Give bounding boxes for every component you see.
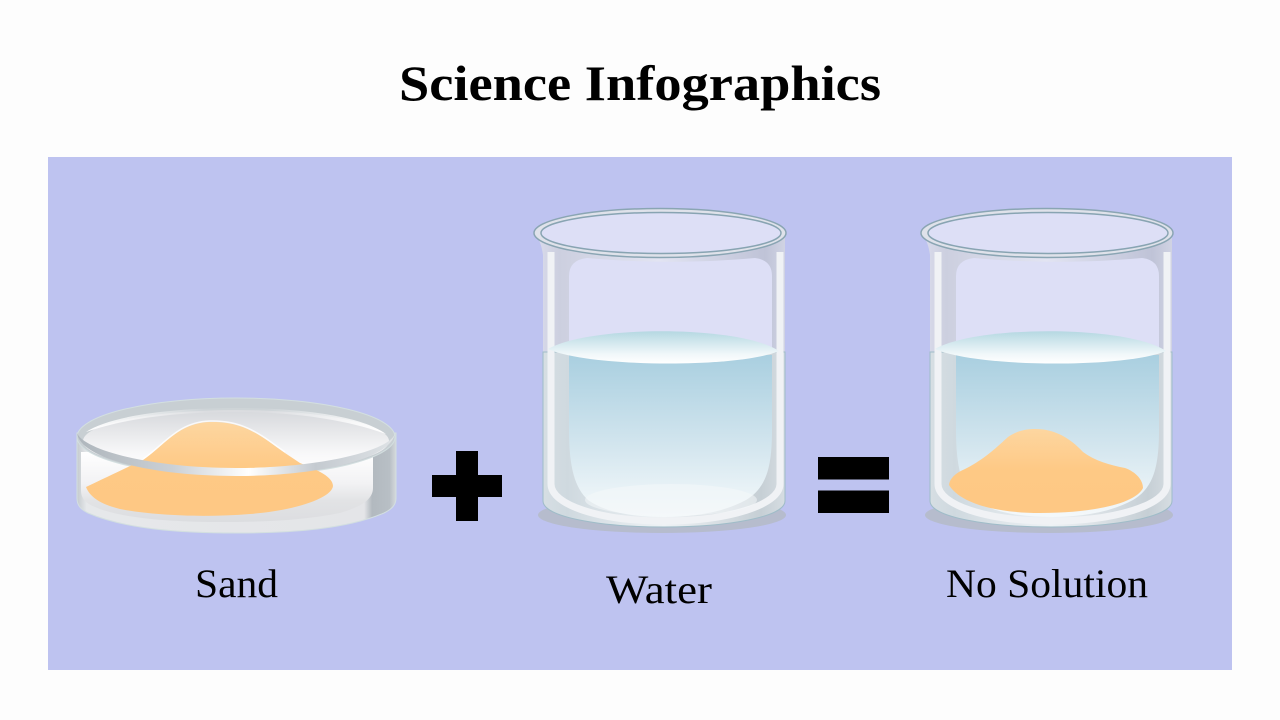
base shadow xyxy=(538,497,786,533)
icon: equals sign xyxy=(818,457,889,513)
sand mound xyxy=(86,422,333,516)
empty interior xyxy=(956,258,1159,350)
settled sand xyxy=(949,429,1143,513)
glass wall lower xyxy=(930,352,1172,527)
label: sand: Sand xyxy=(195,561,278,606)
water body xyxy=(956,355,1159,517)
glass wall upper xyxy=(534,233,785,356)
beaker rim xyxy=(534,208,786,258)
glass highlight band xyxy=(551,252,780,521)
base shadow xyxy=(925,497,1173,533)
water surface xyxy=(548,331,779,364)
icon: beaker with water and settled sand xyxy=(921,208,1173,533)
glass highlight band xyxy=(938,252,1167,521)
title: Science Infographics xyxy=(399,55,881,111)
glass wall upper xyxy=(921,233,1172,356)
beaker floor highlight xyxy=(585,484,757,516)
water body xyxy=(569,355,772,517)
glass wall lower xyxy=(543,352,785,527)
icon: beaker with water xyxy=(534,208,786,533)
label: water: Water xyxy=(606,567,712,612)
panel: experiment background xyxy=(48,157,1232,670)
icon: plus sign xyxy=(432,451,502,521)
label: no solution: No Solution xyxy=(946,561,1148,606)
empty interior xyxy=(569,258,772,350)
icon: petri dish with sand xyxy=(77,398,396,533)
water surface xyxy=(935,331,1166,364)
beaker rim xyxy=(921,208,1173,258)
dish front rim xyxy=(77,433,395,476)
